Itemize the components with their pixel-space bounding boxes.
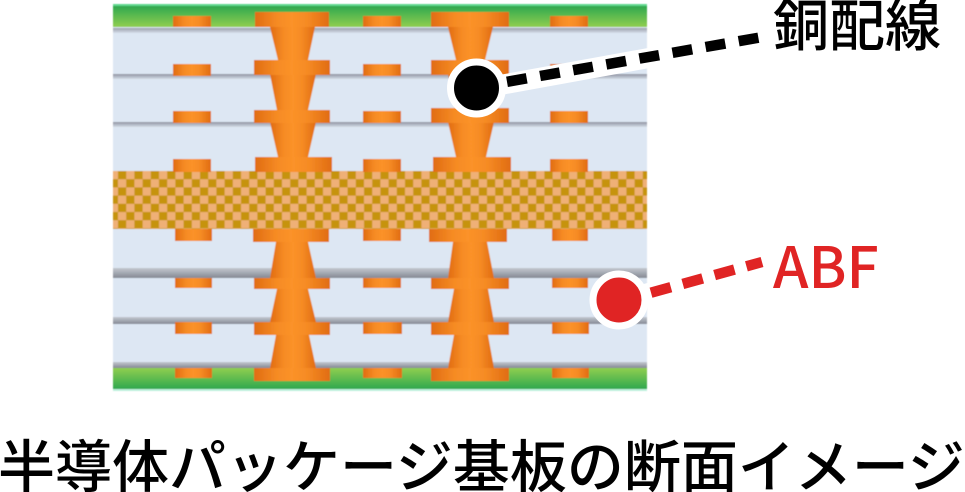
callout: copper wiring leader line [450, 36, 770, 114]
label: ABF: ABF [773, 223, 879, 305]
bottom solder resist [113, 368, 647, 391]
callout: ABF leader line [593, 260, 768, 326]
top solder resist [113, 4, 647, 27]
core layer [113, 171, 647, 229]
substrate cross-section diagram [113, 4, 647, 391]
copper wiring: pads [173, 12, 589, 381]
copper wiring: vias [270, 27, 494, 368]
ABF insulating layers [113, 27, 647, 369]
